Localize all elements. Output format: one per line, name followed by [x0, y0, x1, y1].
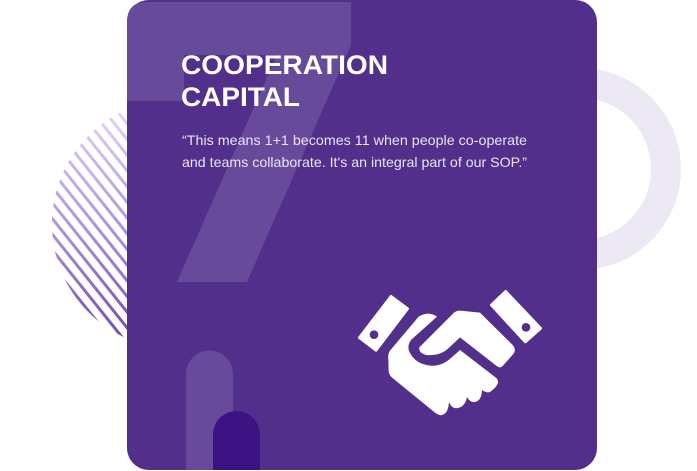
left cuff	[359, 296, 408, 350]
tall arch	[186, 350, 233, 470]
quote text: “This means 1+1 becomes 11 when people co-operate	[182, 132, 527, 148]
quote text: and teams collaborate. It's an integral part of our SOP.”	[182, 154, 527, 170]
quote text	[182, 132, 527, 170]
title	[181, 50, 388, 112]
title: CAPITAL	[181, 82, 300, 112]
striped circle	[52, 110, 127, 338]
decorative ring	[494, 83, 666, 255]
panel: purple card	[127, 0, 597, 470]
large numeral 7	[127, 2, 351, 282]
short arch	[213, 411, 260, 470]
right cuff	[491, 291, 541, 342]
title: COOPERATION	[181, 50, 388, 80]
icon: handshake	[359, 291, 541, 415]
right hand	[419, 311, 515, 367]
left hand	[388, 314, 498, 415]
